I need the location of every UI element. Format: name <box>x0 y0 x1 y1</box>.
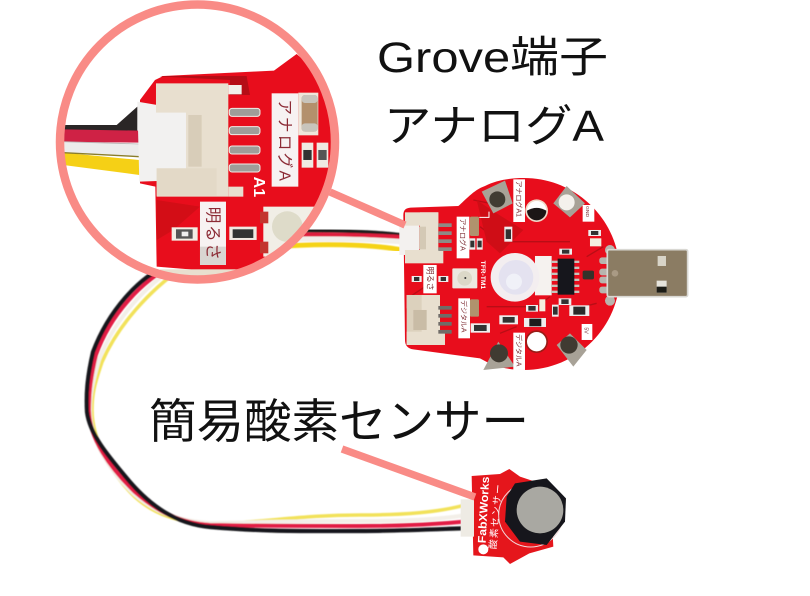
sensor housing <box>499 478 566 547</box>
zoomed connector <box>156 83 243 197</box>
USB plug <box>599 245 688 306</box>
zoomed resistors <box>172 143 328 241</box>
connector top <box>399 212 452 263</box>
lens contents <box>63 54 350 279</box>
darker traces <box>410 200 603 333</box>
PIR sensor dome <box>491 253 552 302</box>
text TFR-TM1: TFR-TM1 <box>479 261 486 289</box>
zoomed right wires <box>292 231 350 249</box>
zoomed bottom connector edge <box>160 269 238 276</box>
zoomed board <box>140 54 331 270</box>
zoomed LED <box>260 207 317 257</box>
sensor board <box>472 469 553 564</box>
sensor connector <box>461 499 474 537</box>
zoomed capacitor <box>298 93 318 135</box>
zoomed label アナログA: アナログA <box>275 99 293 182</box>
mounting hole bottom <box>525 330 548 353</box>
main board <box>399 178 688 370</box>
heading: Grove端子: Grove端子 <box>377 34 608 82</box>
label text: 明るさ <box>425 267 434 291</box>
label text <box>425 181 590 367</box>
zoomed label 明るさ: 明るさ <box>204 207 223 260</box>
label text: 5V <box>583 327 589 334</box>
mounting hole top <box>525 199 548 222</box>
label text: デジタルA <box>460 300 469 333</box>
connector bottom <box>407 295 452 345</box>
terminal pads <box>482 181 587 370</box>
zoomed label アナログA <box>272 93 298 187</box>
heading: 簡易酸素センサー: 簡易酸素センサー <box>149 395 529 448</box>
magnified connector lens <box>64 54 331 276</box>
shaded copper area <box>477 200 523 253</box>
pointer line to connector <box>330 192 405 225</box>
sensor board text: FabXWorks <box>477 476 492 543</box>
zoomed pins <box>229 108 260 172</box>
sensor board text <box>477 476 505 554</box>
label text: アナログA1 <box>514 181 523 217</box>
zoomed left wires <box>63 107 139 175</box>
oxygen sensor <box>461 469 566 564</box>
capacitors and resistors <box>412 217 601 333</box>
board outline <box>403 178 620 370</box>
label text: アナログA <box>458 218 467 251</box>
zoomed label 明るさ <box>200 202 226 265</box>
cable: right section near main board <box>270 231 402 250</box>
pointer line to sensor <box>342 449 475 497</box>
cable: loop to sensor <box>87 264 472 531</box>
zoomed plug <box>137 102 187 182</box>
sensor board text: 酸素センサー <box>487 484 505 550</box>
heading: アナログA: アナログA <box>384 102 605 151</box>
main board: 人感 <box>541 267 550 282</box>
IC chip <box>551 259 579 295</box>
silk line from pad <box>479 212 489 217</box>
label text: GND <box>584 206 590 217</box>
LED <box>452 268 477 288</box>
zoomed label A1: A1 <box>250 177 267 197</box>
lens ring <box>60 4 335 280</box>
label text: デジタルA <box>515 334 524 367</box>
silk labels <box>423 179 594 370</box>
wiring diagram <box>56 0 688 564</box>
